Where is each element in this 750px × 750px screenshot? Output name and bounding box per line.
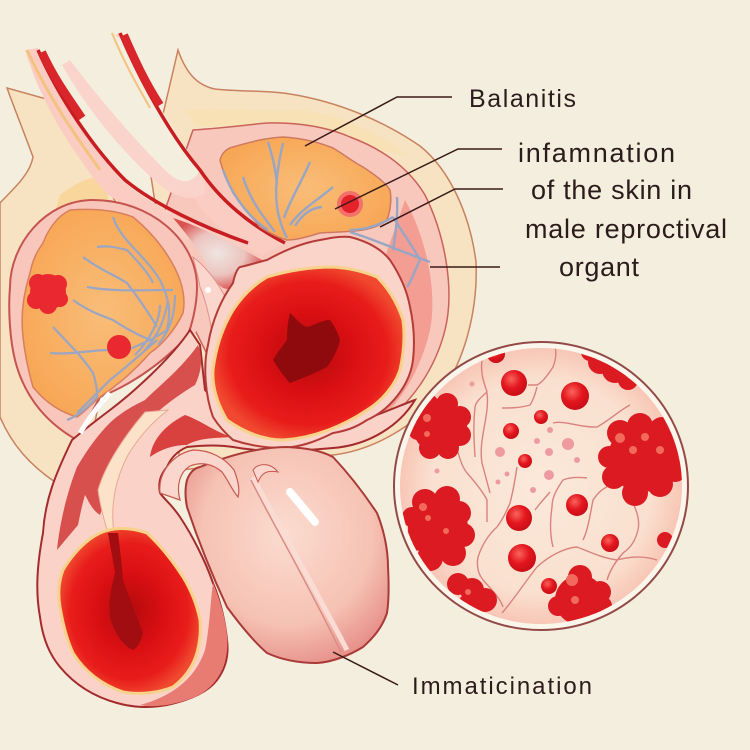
magnified skin circle xyxy=(394,342,688,630)
red clusters xyxy=(402,343,687,625)
centre cavity xyxy=(173,218,262,289)
label: description: organt xyxy=(559,252,639,282)
pink tissue layer xyxy=(130,123,449,440)
right salmon band xyxy=(140,583,227,706)
tube at top xyxy=(25,33,285,258)
highlight xyxy=(290,492,315,522)
cream tube xyxy=(98,410,168,533)
red lesion upper xyxy=(337,191,363,217)
white highlight xyxy=(80,393,110,433)
leader line: inflammation xyxy=(335,149,502,209)
central ulcer xyxy=(205,237,414,448)
red fold xyxy=(150,415,232,457)
leader line: skin xyxy=(380,189,503,227)
lower red ulcer xyxy=(59,528,200,693)
left gland xyxy=(9,200,197,440)
red lesions left xyxy=(27,274,131,359)
label: description xyxy=(518,138,727,282)
lower bulb xyxy=(37,330,415,707)
dark red wedge xyxy=(57,345,201,550)
foreskin fold hook xyxy=(160,450,239,500)
red tube lines xyxy=(38,50,248,243)
leader line: balanitis xyxy=(305,97,452,146)
groove xyxy=(253,477,347,650)
capillaries xyxy=(458,347,657,613)
leader line: immaticination xyxy=(333,652,398,685)
outer tissue layer xyxy=(0,50,476,482)
label: description: infamnation xyxy=(518,138,675,168)
label: description: male reproctival xyxy=(525,214,727,244)
label: Immaticination: Immaticination xyxy=(412,673,592,700)
blue veins upper xyxy=(223,142,430,287)
pink dots xyxy=(434,382,580,493)
label: description: of the skin in xyxy=(531,175,692,205)
red spots xyxy=(487,345,619,594)
small inner fold xyxy=(193,257,231,337)
glans xyxy=(160,447,389,663)
upper orange gland region xyxy=(220,137,430,287)
tube inner space xyxy=(50,35,202,193)
label: Balanitis: Balanitis xyxy=(469,85,576,113)
leader line: organ xyxy=(430,266,500,268)
cluster highlights xyxy=(419,414,664,604)
blue veins left xyxy=(50,217,175,420)
